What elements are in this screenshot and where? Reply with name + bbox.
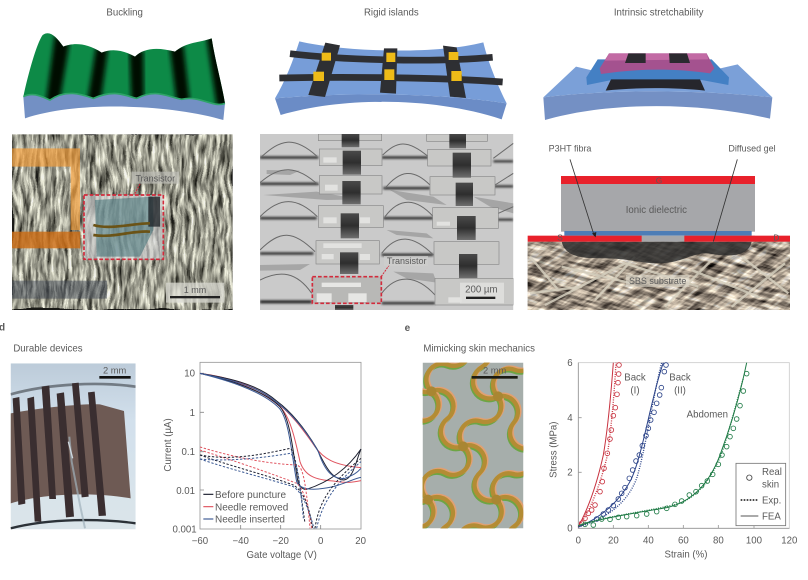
label and arrow: diffused gel: Diffused gel <box>728 143 776 153</box>
chart: current vs gate voltage: −40 <box>232 536 249 547</box>
curve labels: Back <box>624 372 646 383</box>
curves: transfer characteristics <box>200 373 361 528</box>
cross-section: device layers: G <box>656 176 662 186</box>
chart: current vs gate voltage: −60 <box>192 536 208 547</box>
chart: current vs gate voltage <box>163 362 366 561</box>
scale bar: 200 µm: 200 µm <box>465 285 498 296</box>
curve labels <box>624 372 728 420</box>
chart: current vs gate voltage: 20 <box>355 536 366 547</box>
chart: stress vs strain: 80 <box>713 535 724 546</box>
chart: stress vs strain: 20 <box>608 535 619 546</box>
scale bar: 200 µm <box>460 283 504 303</box>
chart: stress vs strain: 120 <box>781 535 797 546</box>
cross-section: device layers: SBS substrate <box>629 276 686 286</box>
legend: Needle removed <box>215 502 288 513</box>
legend: skin <box>762 480 779 491</box>
chart: stress vs strain <box>549 358 797 561</box>
chart: current vs gate voltage: 0.001 <box>172 524 197 535</box>
panel letter e: e <box>405 323 411 334</box>
chart: stress vs strain: 60 <box>678 535 689 546</box>
heading: Buckling: Buckling <box>106 7 143 18</box>
photo: transistor on buckled substrate <box>12 134 233 310</box>
chart: current vs gate voltage: 0 <box>318 536 323 547</box>
chart: stress vs strain: 0 <box>567 524 573 535</box>
callout box: transistor <box>312 256 428 303</box>
image: serpentine network <box>422 362 524 528</box>
panel: mimicking skin mechanics <box>387 323 797 561</box>
chart: stress vs strain: 100 <box>746 535 762 546</box>
chart: current vs gate voltage: 0.1 <box>182 447 195 458</box>
cross-section: device layers <box>528 176 790 310</box>
heading: Durable devices: Durable devices <box>13 343 83 354</box>
scale bar: 2 mm <box>472 366 518 379</box>
legend: Real <box>762 467 782 478</box>
chart: current vs gate voltage: 0.01 <box>176 486 195 497</box>
curve labels: Abdomen <box>687 409 728 420</box>
cross-section: device layers: S <box>557 233 563 243</box>
callout box: transistor: Transistor <box>387 256 426 266</box>
diagram: intrinsically stretchable layers <box>543 53 772 120</box>
cross-section: device layers: D <box>773 233 779 243</box>
scale bar: 2 mm <box>99 366 131 379</box>
curves: abdomen <box>578 363 749 527</box>
scale bar: 1 mm: 1 mm <box>184 285 206 295</box>
legend: FEA <box>762 512 781 523</box>
SEM image: island array <box>260 133 513 310</box>
chart: stress vs strain: 2 <box>567 468 573 479</box>
diagram: rigid islands on substrate <box>275 41 507 119</box>
scale bar: 1 mm <box>166 283 224 303</box>
chart: current vs gate voltage: Current (µA) <box>163 418 174 472</box>
panel: buckling <box>12 7 233 310</box>
callout box: transistor <box>84 172 179 259</box>
legend <box>736 463 786 526</box>
chart: stress vs strain: Strain (%) <box>665 550 707 561</box>
chart: current vs gate voltage: −20 <box>272 536 289 547</box>
curve labels: (II) <box>674 386 686 397</box>
diagram: buckled film on substrate <box>23 33 233 120</box>
legend: Needle inserted <box>215 514 285 525</box>
panel: rigid islands <box>260 7 513 310</box>
legend: Exp. <box>762 496 781 507</box>
legend <box>203 490 288 525</box>
label and arrow: P3HT fibre: P3HT fibra <box>549 143 591 153</box>
curves: back I <box>578 363 621 527</box>
chart: current vs gate voltage: 10 <box>184 369 195 380</box>
chart: stress vs strain: Stress (MPa) <box>549 421 560 478</box>
callout box: transistor: Transistor <box>136 173 175 183</box>
photo: punctured device <box>11 363 136 529</box>
heading: Rigid islands: Rigid islands <box>364 7 419 18</box>
panel: durable devices <box>0 322 366 561</box>
chart: current vs gate voltage: Gate voltage (V) <box>247 550 317 561</box>
chart: current vs gate voltage: 1 <box>190 408 195 419</box>
heading: Mimicking skin mechanics: Mimicking skin mechanics <box>423 343 535 354</box>
chart: stress vs strain: 4 <box>567 413 573 424</box>
cross-section: device layers: Ionic dielectric <box>626 205 687 216</box>
curve labels: (I) <box>630 386 640 397</box>
curves: back II <box>578 363 668 527</box>
heading: Intrinsic stretchability: Intrinsic stretchability <box>614 7 704 18</box>
curve labels: Back <box>669 372 691 383</box>
scale bar: 2 mm: 2 mm <box>483 366 507 376</box>
panel: intrinsic stretchability <box>528 8 790 310</box>
label and arrow: diffused gel <box>713 143 776 242</box>
label and arrow: P3HT fibre <box>549 143 596 237</box>
chart: stress vs strain: 40 <box>643 535 654 546</box>
scale bar: 2 mm: 2 mm <box>103 366 127 376</box>
legend: Before puncture <box>215 490 286 501</box>
chart: stress vs strain: 0 <box>576 535 581 546</box>
chart: stress vs strain: 6 <box>567 358 573 369</box>
